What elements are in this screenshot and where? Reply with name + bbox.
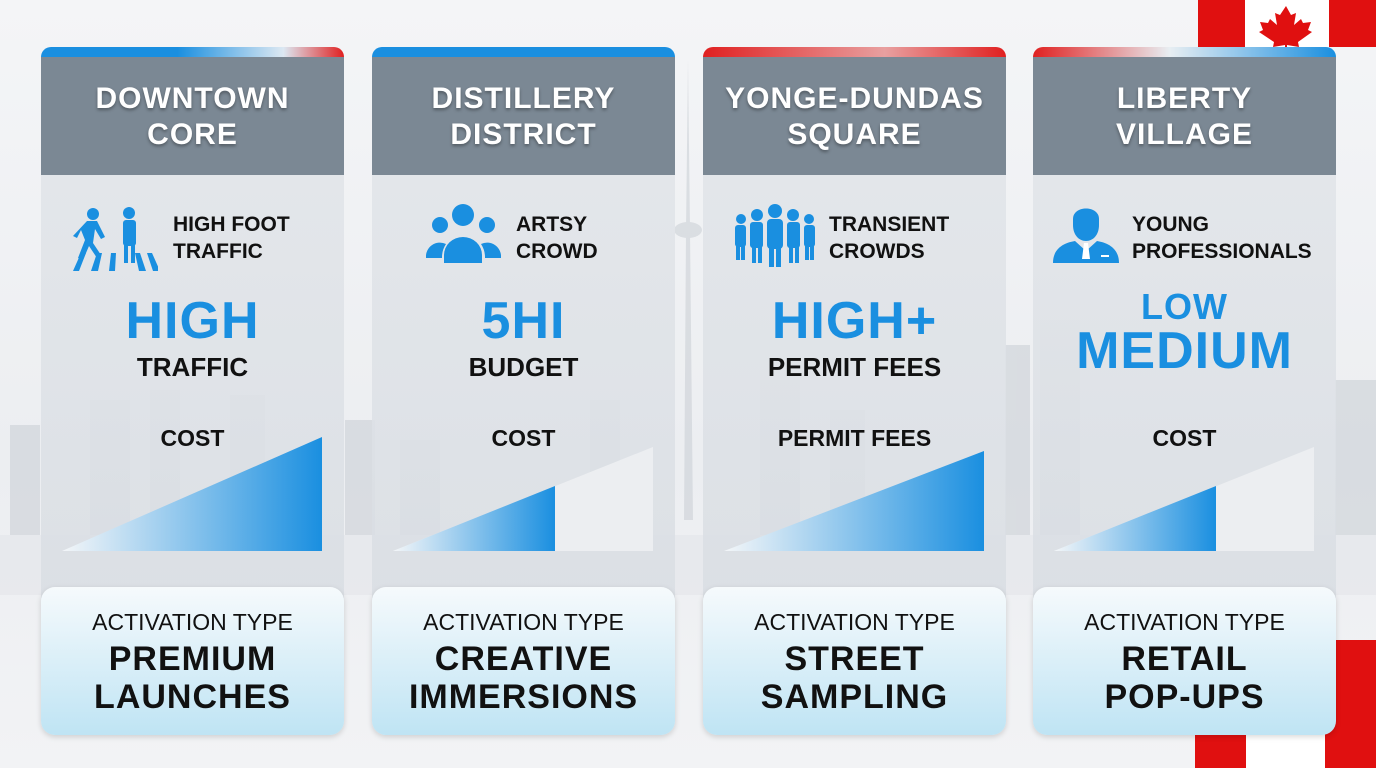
panel: distillery district <box>370 47 677 739</box>
heading: YONGE-DUNDAS <box>725 82 984 115</box>
heading: VILLAGE <box>1116 118 1253 151</box>
chart: cost <box>394 447 653 551</box>
feature: transient crowds: CROWDS <box>829 240 925 263</box>
panel: yonge-dundas square: PERMIT FEES <box>778 425 931 451</box>
feature: artsy crowd: CROWD <box>516 240 598 263</box>
heading: DOWNTOWN <box>95 82 290 115</box>
heading: SQUARE <box>787 118 922 151</box>
activation type <box>1033 587 1336 735</box>
feature: transient crowds: TRANSIENT <box>829 213 949 236</box>
chart: permit fees <box>724 451 984 551</box>
activation type: LAUNCHES <box>94 678 291 716</box>
feature: artsy crowd <box>426 204 598 263</box>
metric: LOW <box>1141 286 1228 327</box>
activation type: CREATIVE <box>435 640 612 678</box>
chart: cost <box>1054 447 1314 551</box>
chart: cost: COST <box>161 425 224 451</box>
panel: downtown core <box>39 47 346 739</box>
panel: liberty village: COST <box>1153 425 1216 451</box>
feature: high foot traffic: TRAFFIC <box>173 240 263 263</box>
panel: liberty village: MEDIUM <box>1076 322 1293 380</box>
panel: yonge-dundas square: PERMIT FEES <box>768 352 941 382</box>
feature: young professionals <box>1053 208 1312 263</box>
panel: distillery district: BUDGET <box>469 352 578 382</box>
feature: artsy crowd: ARTSY <box>516 213 587 236</box>
heading <box>372 57 675 175</box>
flag bottom right <box>1195 640 1376 768</box>
heading: DISTRICT <box>450 118 597 151</box>
panel: downtown core: TRAFFIC <box>137 352 248 382</box>
activation type <box>41 587 344 735</box>
activation type: ACTIVATION TYPE <box>754 609 955 635</box>
metric: HIGH <box>126 292 260 350</box>
activation type <box>703 587 1006 735</box>
heading: CORE <box>147 118 238 151</box>
activation type: PREMIUM <box>109 640 276 678</box>
panel: liberty village <box>1031 47 1338 739</box>
heading <box>1033 57 1336 175</box>
activation type: ACTIVATION TYPE <box>92 609 293 635</box>
panel: distillery district: COST <box>492 425 555 451</box>
activation type: IMMERSIONS <box>409 678 638 716</box>
panel: yonge-dundas square <box>701 47 1008 739</box>
activation type: STREET <box>784 640 925 678</box>
activation type: RETAIL <box>1121 640 1248 678</box>
feature: high foot traffic <box>73 207 290 271</box>
heading: LIBERTY <box>1117 82 1252 115</box>
heading <box>703 57 1006 175</box>
heading <box>41 57 344 175</box>
feature: young professionals: YOUNG <box>1132 213 1209 236</box>
feature: high foot traffic: HIGH FOOT <box>173 213 290 236</box>
icon: maple leaf <box>1259 6 1312 47</box>
feature: young professionals: PROFESSIONALS <box>1132 240 1312 263</box>
activation type: ACTIVATION TYPE <box>423 609 624 635</box>
activation type: ACTIVATION TYPE <box>1084 609 1285 635</box>
heading: DISTILLERY <box>432 82 615 115</box>
activation type: SAMPLING <box>761 678 948 716</box>
metric: HIGH+ <box>772 292 937 350</box>
activation type: POP-UPS <box>1104 678 1265 716</box>
feature: transient crowds <box>735 204 949 267</box>
metric: 5HI <box>482 292 565 350</box>
flag top right <box>1198 0 1376 47</box>
activation type <box>372 587 675 735</box>
